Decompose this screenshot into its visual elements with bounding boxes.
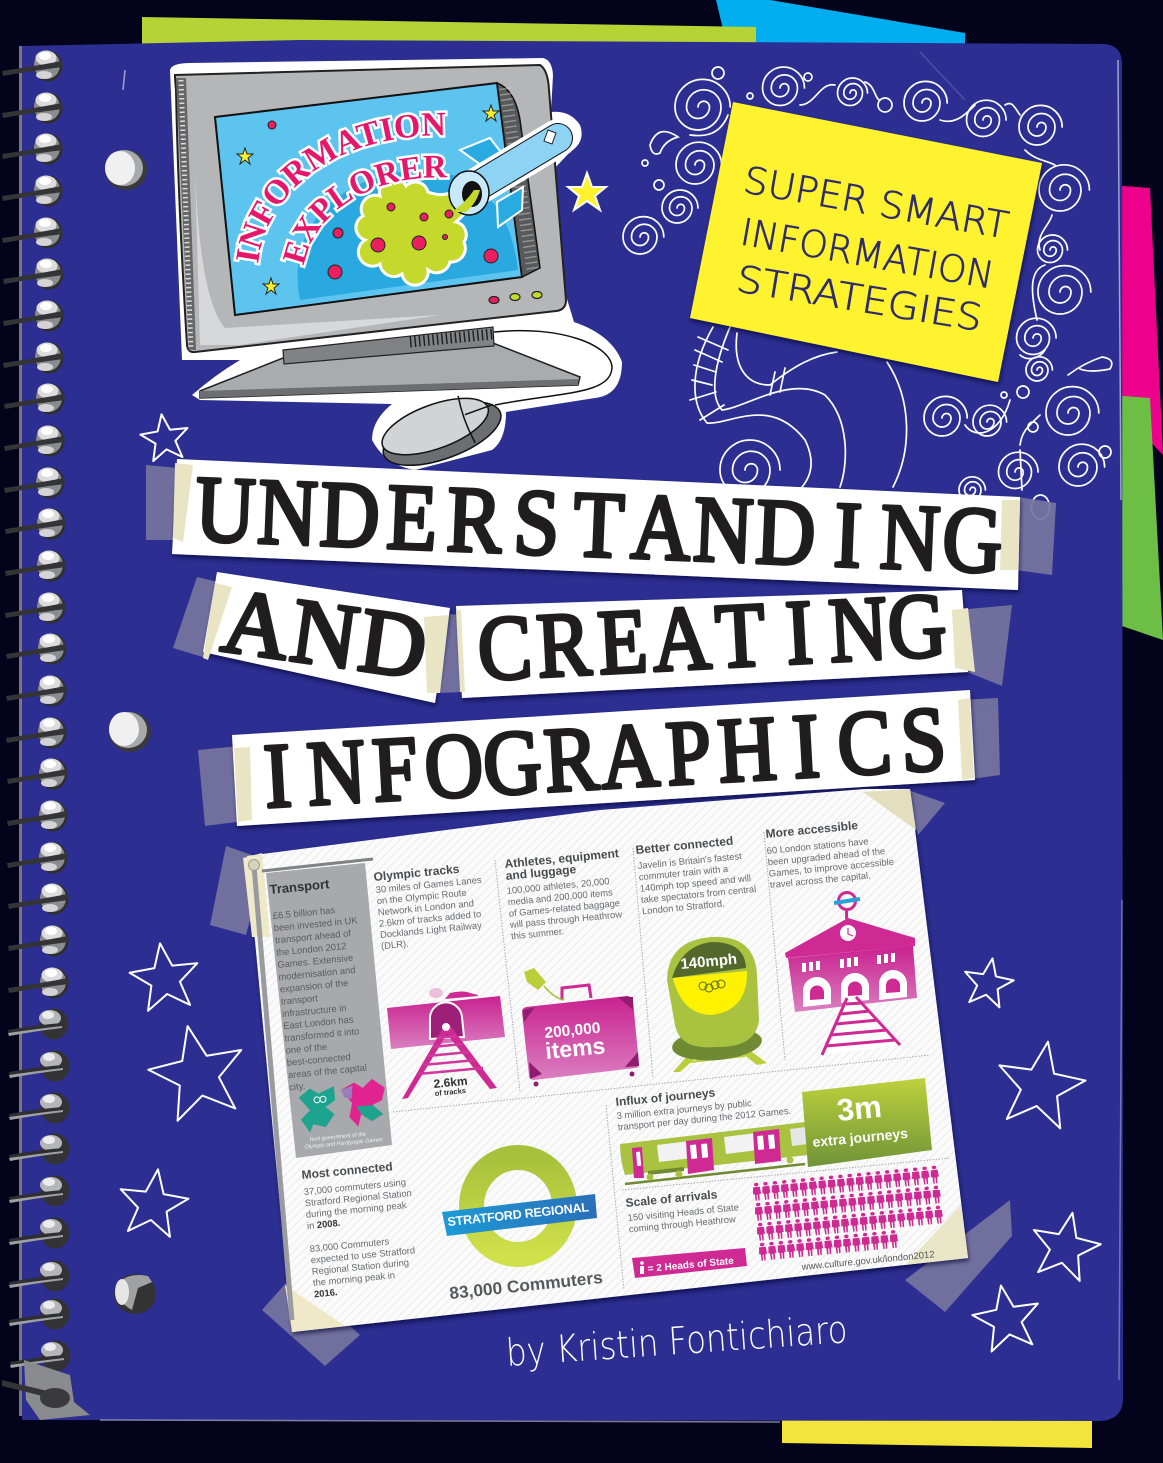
note text [734, 159, 1012, 340]
body: Javelin is Britain's fastest [637, 850, 743, 871]
heading: Influx of journeys [615, 1085, 716, 1109]
label: 2.6km of tracks: 2.6km [433, 1074, 468, 1091]
source url: www.culture.gov.uk/london2012 [800, 1249, 935, 1273]
rocket streamers [460, 138, 507, 170]
body 2016: the morning peak in [312, 1269, 395, 1288]
body: been upgraded ahead of the [767, 845, 886, 867]
heading: and luggage [505, 862, 577, 883]
pink title: information explorer: INFORMATION [233, 110, 448, 266]
icon: suitcase [522, 968, 639, 1086]
section: athletes, equipment and luggage [504, 846, 639, 1086]
title word: CREATING [475, 574, 949, 700]
green blob [356, 178, 480, 285]
body: on the Olympic Route [376, 887, 467, 906]
body: London to Stratford. [642, 897, 725, 916]
body 2008: during the morning peak [305, 1199, 407, 1220]
rocket ring [449, 171, 489, 215]
body: media and 200,000 items [507, 886, 613, 907]
transport body: Games. Extensive [277, 952, 354, 970]
mouse [373, 383, 509, 478]
icon: tunnel and tracks [387, 988, 505, 1099]
loose gold star [568, 173, 606, 210]
grommet holes [105, 150, 156, 1314]
paralympic logo [340, 1078, 388, 1128]
buttons [489, 292, 542, 304]
stat: 83,000 commuters: 83,000 Commuters [448, 1268, 604, 1303]
body 2016: expected to use Stratford [310, 1244, 416, 1265]
body: 100,000 athletes, 20,000 [506, 875, 610, 896]
body 2016: Regional Station during [311, 1256, 409, 1277]
infographic paper [243, 789, 968, 1332]
heading: Better connected [635, 834, 734, 857]
monitor neck [283, 327, 494, 364]
pictogram: 75 people [752, 1165, 943, 1261]
transport body: infrastructure in [282, 1002, 347, 1019]
section: scale of arrivals [625, 1165, 943, 1278]
pink title: information explorer: EXPLORER [280, 153, 450, 268]
note text: INFORMATION [737, 211, 997, 297]
transport body: modernisation and [278, 964, 356, 982]
body: Network in London and [377, 897, 474, 917]
body: take spectators from central [640, 883, 757, 905]
heading: Olympic tracks [373, 862, 460, 884]
transport body: expansion of the [279, 977, 349, 994]
rocket [478, 138, 558, 186]
transport heading: Transport [269, 876, 331, 897]
section: influx of journeys [615, 1078, 932, 1184]
panel: transport banner [262, 859, 392, 1158]
icon: tunnel and tracks: of tracks [434, 1086, 466, 1098]
left vent [176, 78, 196, 350]
section: most connected [301, 1159, 419, 1299]
body: will pass through Heathrow [508, 908, 623, 930]
icon: javelin train [667, 937, 767, 1072]
legend: heads of state [632, 1248, 747, 1278]
monitor lower highlight [195, 170, 440, 345]
body 2008: Stratford Regional Station [304, 1187, 412, 1208]
title word: INFOGRAPHICS [261, 687, 949, 827]
body 2016: 83,000 Commuters [309, 1235, 390, 1254]
heading: More accessible [765, 818, 859, 841]
transport body: the London 2012 [276, 940, 347, 958]
sticker outline [170, 58, 622, 470]
tab: green right [1110, 395, 1163, 640]
transport body: transformed it into [284, 1025, 360, 1043]
spiral binding spine [19, 46, 22, 1416]
body 2008: 37,000 commuters using [303, 1176, 406, 1197]
roundel label: STRATFORD REGIONAL [447, 1200, 590, 1229]
transport body: £6.5 billion has [272, 904, 336, 921]
tab: cyan top [716, 0, 965, 50]
heading: Athletes, equipment [504, 846, 619, 871]
section: more accessible [765, 818, 917, 1055]
transport body: city. [289, 1080, 306, 1092]
tape pieces on infographic [210, 789, 1012, 1366]
note text: SUPER SMART [740, 159, 1012, 247]
icon: suitcase: items [544, 1032, 606, 1064]
body 2016: 2016. [314, 1286, 338, 1299]
transport body: areas of the capital [287, 1062, 367, 1080]
callout: 3m extra journeys [802, 1078, 932, 1167]
tab: green top [142, 17, 756, 50]
logo caption: Olympic and Paralympic Games [304, 1137, 383, 1151]
body: 150 visiting Heads of State [627, 1201, 739, 1223]
body: Docklands Light Railway [379, 919, 482, 940]
monitor body [175, 65, 566, 352]
callout: 3m extra journeys: extra journeys [812, 1125, 909, 1150]
note text: STRATEGIES [734, 257, 985, 340]
body: this summer. [511, 925, 564, 941]
red dots [268, 121, 498, 279]
body: 30 miles of Games Lanes [375, 874, 482, 895]
body: commuter train with a [638, 863, 729, 882]
flag pole [254, 866, 292, 1320]
suitcase label: 200,000 [544, 1020, 601, 1042]
yellow stars on screen [237, 105, 499, 294]
pole knob [248, 860, 260, 870]
tab: yellow bottom [782, 1410, 1092, 1448]
screen right bezel [497, 83, 540, 277]
roundel: stratford regional [442, 1158, 597, 1254]
title strip: creating [456, 574, 975, 700]
icon: station [785, 892, 917, 1055]
section: better connected [635, 834, 767, 1072]
body: (DLR). [381, 938, 409, 951]
body 2008: in [306, 1219, 317, 1231]
body: transport per day during the 2012 Games. [617, 1105, 792, 1132]
legend: heads of state: = 2 Heads of State [647, 1256, 735, 1275]
doodles: white swirls [623, 67, 1112, 519]
spiral binding rings [2, 50, 70, 1372]
body: of Games-related baggage [508, 897, 620, 919]
heading: Most connected [301, 1159, 393, 1182]
title word: UNDERSTANDING [193, 457, 1004, 594]
worn binding corner [2, 1360, 90, 1420]
dotted dividers [393, 832, 950, 1290]
speed label: 140mph [680, 951, 738, 973]
body: travel across the capital. [769, 869, 871, 890]
body: 140mph top speed and will [639, 872, 751, 894]
body 2008: 2008. [316, 1217, 341, 1230]
stand [200, 343, 580, 398]
heading: Scale of arrivals [625, 1187, 718, 1210]
transport body: best-connected [286, 1051, 351, 1068]
logo caption: host government of the [310, 1132, 366, 1143]
author: by Kristin Fontichiaro [505, 1307, 849, 1375]
body: 2.6km of tracks added to [378, 908, 482, 929]
icon: train [620, 1122, 808, 1184]
body: 3 million extra journeys by public [616, 1097, 752, 1121]
cursor cable [494, 331, 612, 405]
body: Games, to improve accessible [768, 856, 894, 879]
sticky note [690, 102, 1042, 382]
callout: 3m extra journeys: 3m [835, 1089, 883, 1128]
screen dark swoosh [298, 170, 518, 300]
transport body: transport ahead of [274, 927, 352, 945]
doodles: white stars [115, 411, 1106, 1354]
transport body: been invested in UK [273, 914, 359, 933]
screen [215, 83, 522, 315]
title strip: infographics [232, 687, 975, 827]
body: coming through Heathrow [628, 1213, 736, 1234]
olympic logo [298, 1086, 338, 1133]
olympic rings [699, 980, 725, 992]
transport body: one of the [285, 1041, 328, 1056]
section: olympic tracks [373, 862, 505, 1099]
title strip: and [203, 569, 450, 703]
transport body: transport [280, 992, 319, 1007]
tape pieces on title strips [146, 465, 1056, 826]
title strip: understanding [172, 457, 1020, 594]
illustration: computer [170, 58, 622, 470]
body: 60 London stations have [766, 835, 869, 856]
title word: AND [216, 569, 433, 698]
tab: magenta right [1110, 185, 1163, 455]
transport body: East London has [283, 1013, 354, 1031]
